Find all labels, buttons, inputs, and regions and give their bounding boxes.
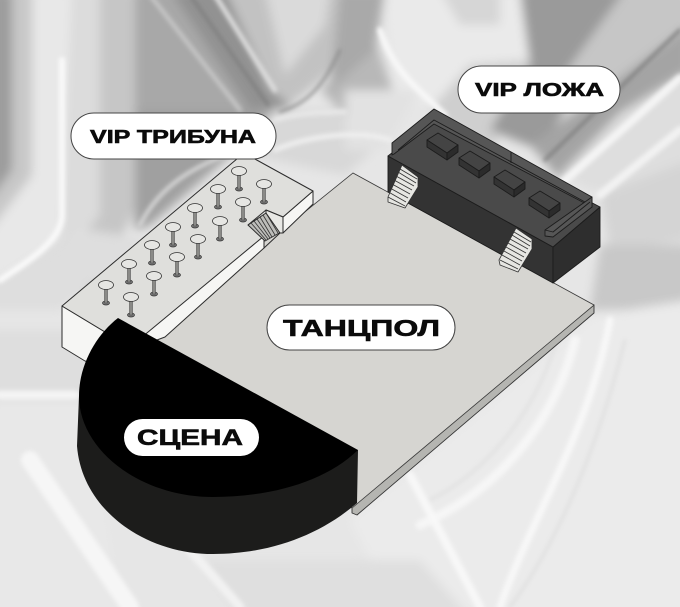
box seats (427, 133, 560, 218)
VIP tribune stand (62, 153, 313, 375)
label: stage: СЦЕНА (137, 425, 243, 450)
label: VIP box (458, 66, 620, 113)
box side face (553, 207, 600, 283)
box floor (388, 120, 600, 247)
label: dance floor: ТАНЦПОЛ (283, 315, 440, 341)
tribune stairs (248, 210, 283, 248)
tribune top surface (62, 153, 313, 347)
right stairs (499, 228, 532, 272)
VIP box structure (388, 109, 600, 283)
stage side (77, 396, 358, 554)
label: stage (124, 419, 259, 456)
stage top (79, 318, 358, 497)
label: VIP box: VIP ЛОЖА (475, 80, 604, 100)
left stairs (388, 165, 418, 208)
stage (77, 318, 358, 554)
label: VIP tribune: VIP ТРИБУНА (90, 127, 256, 147)
box front face (388, 156, 553, 283)
box back wall (392, 109, 592, 237)
label: dance floor (267, 305, 455, 350)
label: VIP tribune (71, 113, 276, 159)
tribune white side faces (62, 191, 313, 375)
tribune tables (98, 166, 272, 317)
dance floor (140, 173, 594, 515)
